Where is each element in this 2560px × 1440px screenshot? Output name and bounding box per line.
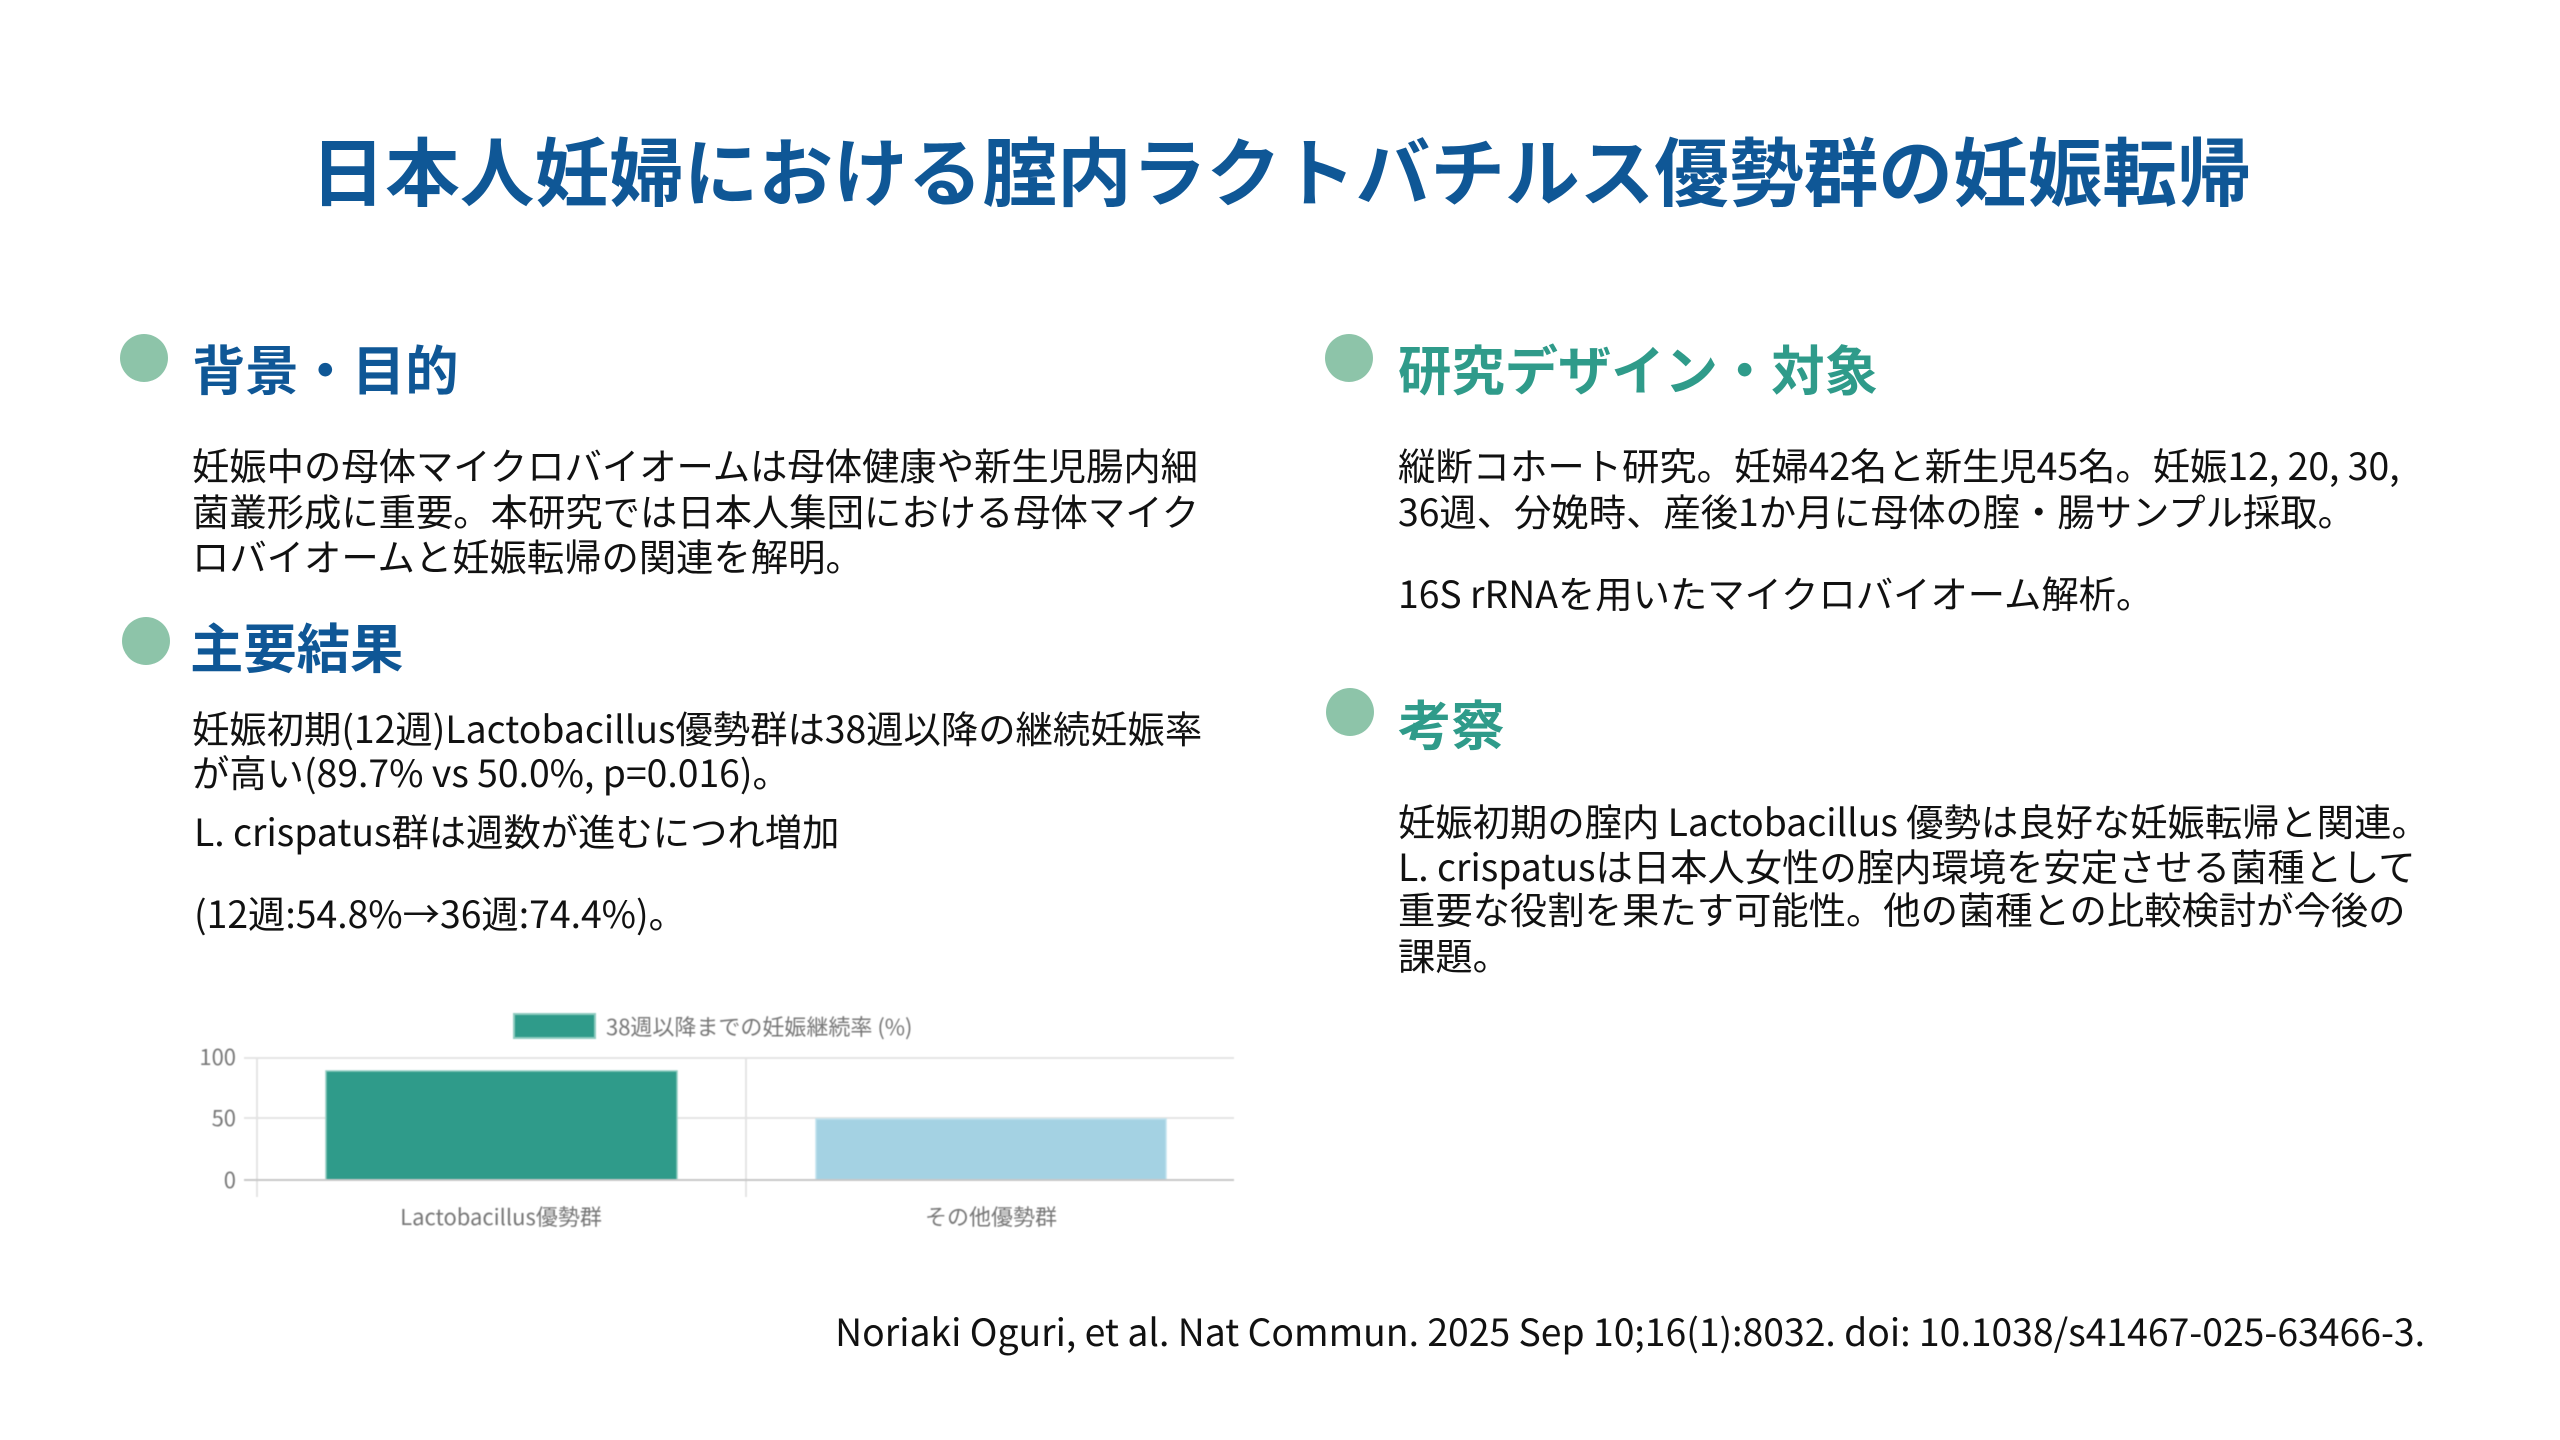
text: key results: が高い(89.7% vs 50.0%, p=0.016)。 (192, 744, 790, 798)
icon: results bullet (122, 617, 170, 665)
x axis labels: その他優勢群 (925, 1200, 1057, 1232)
y axis labels: 0 (224, 1163, 236, 1195)
text: study design: 縦断コホート研究。妊婦42名と新生児45名。妊娠12, 20, 30, (1398, 437, 2400, 491)
text: discussion: 課題。 (1398, 927, 1510, 981)
text: background and purpose: ロバイオームと妊娠転帰の関連を解明。 (192, 528, 863, 582)
icon: discussion bullet (1326, 688, 1374, 736)
text: discussion: L. crispatusは日本人女性の腟内環境を安定させる菌種として (1398, 838, 2416, 892)
text: background and purpose: 妊娠中の母体マイクロバイオームは母体健康や新生児腸内細 (192, 437, 1198, 491)
icon: design bullet (1325, 334, 1373, 382)
heading: discussion: 考察 (1398, 684, 1505, 761)
text: discussion: 重要な役割を果たす可能性。他の菌種との比較検討が今後の (1398, 881, 2406, 935)
title: 日本人妊婦における腟内ラクトバチルス優勢群の妊娠転帰 (310, 113, 2252, 222)
text: key results: L. crispatus群は週数が進むにつれ増加 (194, 803, 839, 857)
text: background and purpose: 菌叢形成に重要。本研究では日本人集団における母体マイク (192, 483, 1199, 537)
x axis labels: Lactobacillus優勢群 (400, 1200, 602, 1232)
text: discussion: 妊娠初期の腟内 Lactobacillus 優勢は良好な妊娠転帰と関連。 (1398, 793, 2429, 847)
bar: Lactobacillus dominant (326, 1071, 677, 1180)
bar chart: pregnancy continuation rate (199, 1010, 1234, 1232)
text: background and purpose (192, 437, 1199, 582)
heading: key results: 主要結果 (190, 607, 403, 684)
bar: other dominant (816, 1119, 1166, 1180)
y axis labels: 50 (212, 1101, 236, 1133)
text: study design: 36週、分娩時、産後1か月に母体の腟・腸サンプル採取。 (1398, 483, 2355, 537)
text: key results: (12週:54.8%→36週:74.4%)。 (194, 885, 686, 939)
y axis labels (199, 1040, 236, 1195)
x axis labels (400, 1200, 1057, 1232)
legend: 38週以降までの妊娠継続率 (%) (606, 1010, 912, 1042)
heading: background and purpose: 背景・目的 (192, 329, 459, 406)
text: study design: 16S rRNAを用いたマイクロバイオーム解析。 (1398, 565, 2153, 619)
icon: background bullet (120, 334, 168, 382)
text: study design (1398, 437, 2400, 619)
y axis labels: 100 (199, 1040, 236, 1072)
text: discussion (1398, 793, 2429, 981)
text: key results (192, 700, 1202, 939)
heading: study design: 研究デザイン・対象 (1398, 329, 1878, 406)
citation: Noriaki Oguri, et al. Nat Commun. 2025 Sep 10;16(1):8032. doi: 10.1038/s41467-025-63466-3. (835, 1303, 2425, 1357)
text: key results: 妊娠初期(12週)Lactobacillus優勢群は38週以降の継続妊娠率 (192, 700, 1202, 754)
